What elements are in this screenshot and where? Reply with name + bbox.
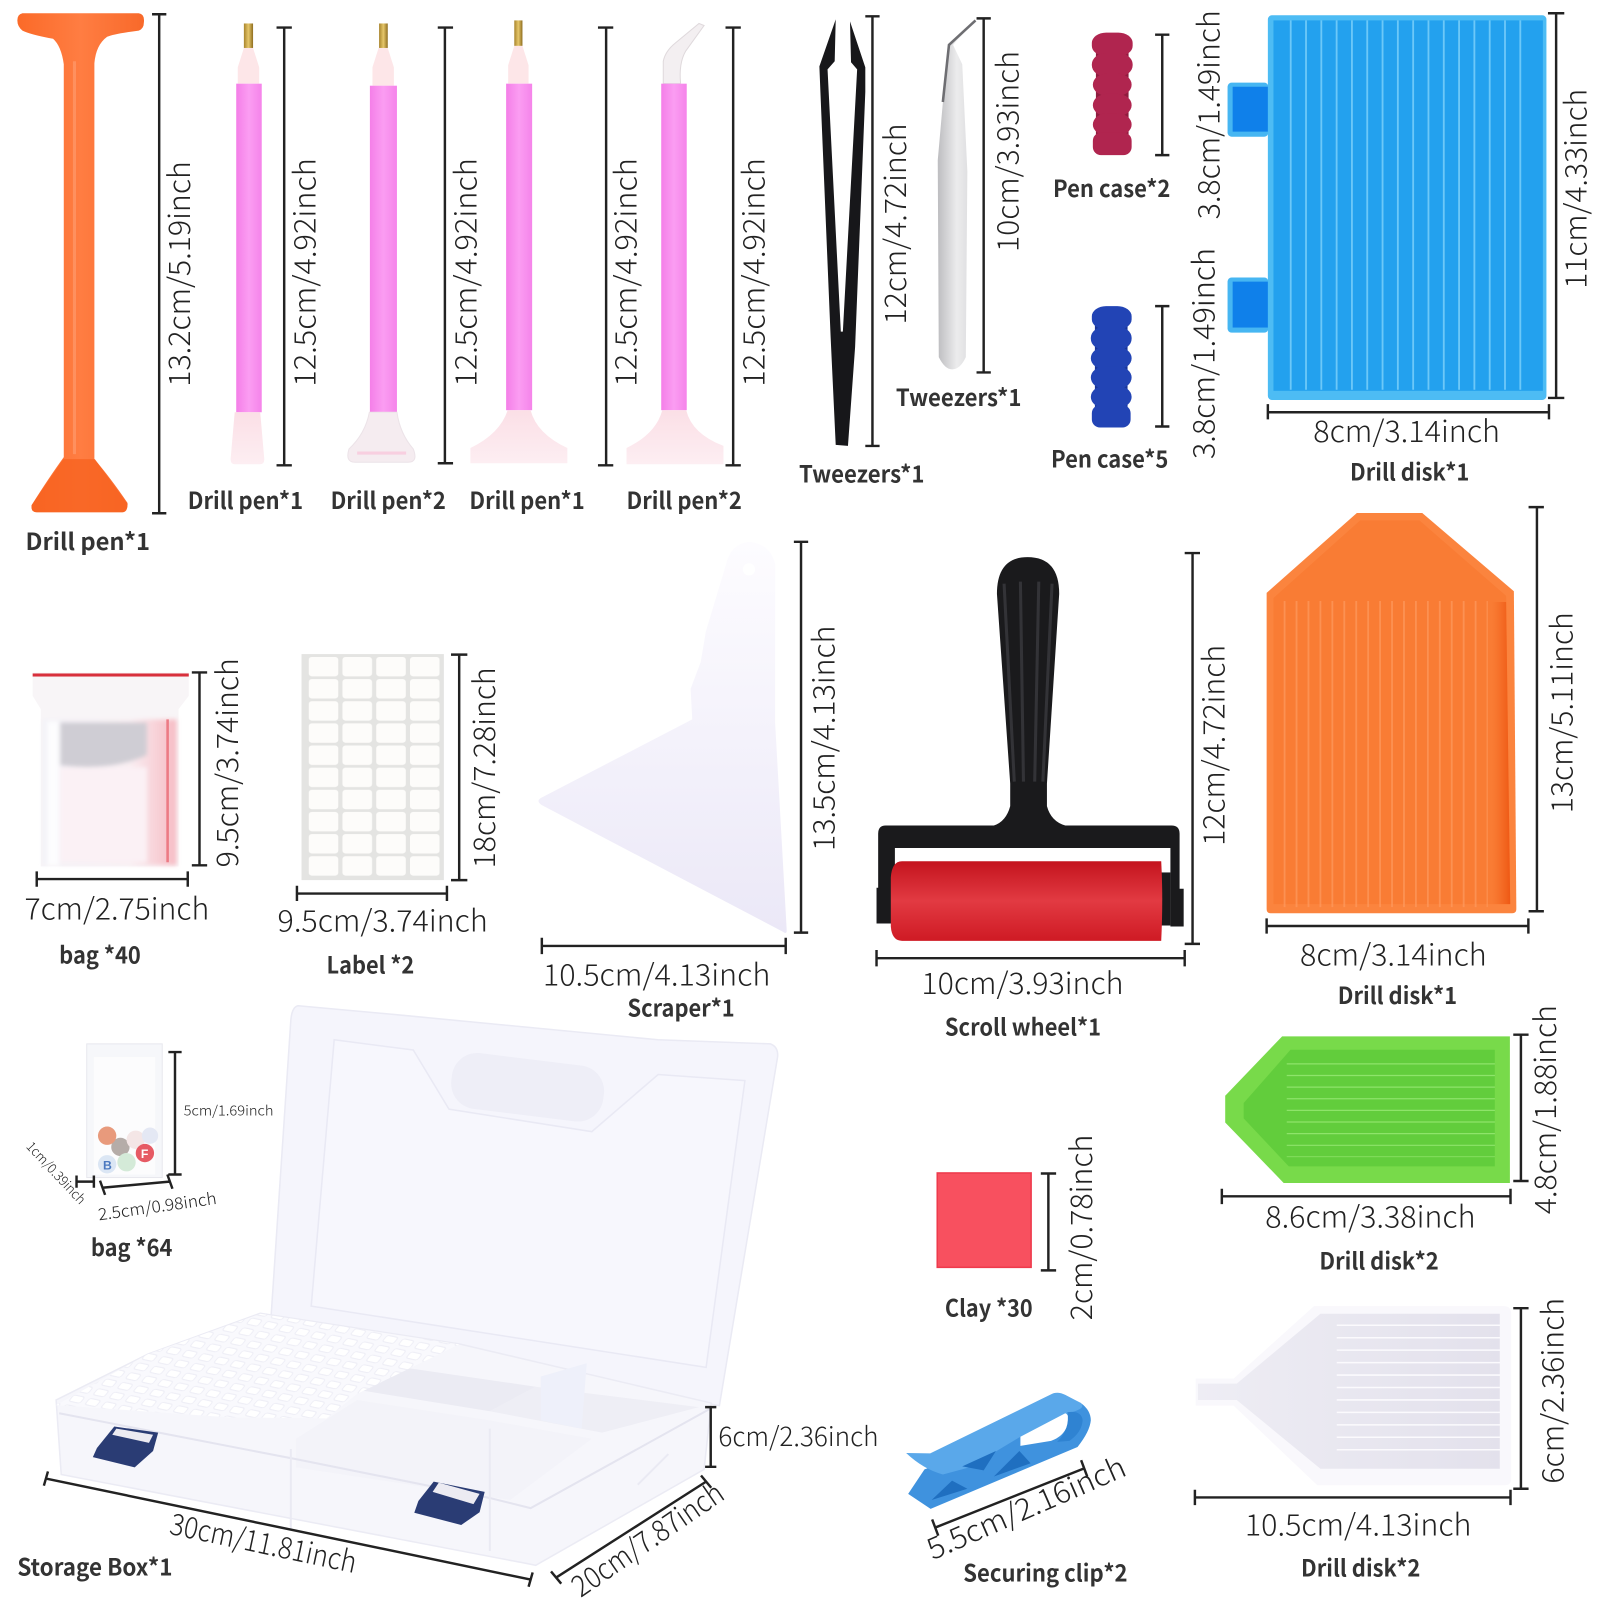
text: 12.5cm/4.92inch: 12.5cm/4.92inch — [603, 158, 646, 387]
text: 9.5cm/3.74inch: 9.5cm/3.74inch — [278, 898, 488, 941]
label: Drill pen*2: Drill pen*2 — [331, 482, 446, 516]
icon: open transparent storage box — [56, 1006, 778, 1565]
label: bag *64: bag *64 — [91, 1229, 173, 1263]
dimension: white tray width — [1195, 1490, 1511, 1505]
icon: pink pen four — [627, 23, 723, 464]
text: 6cm/2.36inch: 6cm/2.36inch — [1529, 1298, 1572, 1484]
dimension: clip length — [932, 1460, 1087, 1536]
icon: red foam pen case — [1092, 33, 1133, 155]
icon: white triangular scraper — [538, 542, 787, 933]
label: Drill pen*1: Drill pen*1 — [469, 482, 585, 516]
text: 13.5cm/4.13inch: 13.5cm/4.13inch — [801, 626, 844, 851]
lid of box — [270, 1006, 778, 1406]
icon: orange pointed tray — [1267, 513, 1516, 913]
label: Securing clip*2: Securing clip*2 — [963, 1555, 1128, 1589]
bead bottles inside box — [56, 1314, 459, 1418]
icon: black handled red roller — [877, 557, 1184, 941]
text: 12cm/4.72inch: 12cm/4.72inch — [1190, 645, 1233, 846]
dimension: black tweezers height — [865, 16, 880, 446]
dimension: pen four height — [726, 28, 741, 465]
item: small bead bottle — [23, 1044, 273, 1263]
icon: clear zip bag — [33, 672, 189, 866]
dimension: bottle height — [168, 1052, 182, 1174]
text: 11cm/4.33inch: 11cm/4.33inch — [1553, 89, 1596, 289]
left latch — [93, 1427, 158, 1467]
label: Tweezers*1: Tweezers*1 — [896, 379, 1021, 413]
text: 10.5cm/4.13inch: 10.5cm/4.13inch — [543, 952, 770, 995]
text: 12.5cm/4.92inch: 12.5cm/4.92inch — [730, 158, 773, 387]
dimension: green tray width — [1222, 1189, 1511, 1204]
dimension: white tray height — [1513, 1308, 1529, 1489]
icon: blue securing clip — [906, 1393, 1091, 1509]
text: 3.8cm/1.49inch: 3.8cm/1.49inch — [1185, 10, 1228, 219]
icon: clear bottle with letter beads: B — [103, 1158, 112, 1172]
item: pink drill pen with narrow tip — [188, 23, 324, 516]
label: Drill pen*1: Drill pen*1 — [26, 523, 150, 557]
icon: green pointed tray — [1225, 1036, 1510, 1183]
icon: orange double-ended drill pen — [17, 13, 144, 512]
base of box — [56, 1313, 711, 1565]
label: Drill disk*2: Drill disk*2 — [1319, 1242, 1439, 1276]
text: 12.5cm/4.92inch: 12.5cm/4.92inch — [281, 158, 324, 387]
text: 5.5cm/2.16inch: 5.5cm/2.16inch — [919, 1444, 1132, 1568]
text: 8.6cm/3.38inch: 8.6cm/3.38inch — [1265, 1194, 1476, 1237]
text: 5cm/1.69inch: 5cm/1.69inch — [184, 1099, 273, 1119]
dimension: clay height — [1041, 1173, 1056, 1270]
dimension: drill pen height — [152, 14, 166, 513]
right latch — [414, 1482, 485, 1525]
text: 10.5cm/4.13inch: 10.5cm/4.13inch — [1245, 1502, 1471, 1545]
dimension: bottle width and depth — [77, 1174, 172, 1195]
text: 2.5cm/0.98inch: 2.5cm/0.98inch — [96, 1185, 218, 1225]
dimension: bag height — [192, 672, 207, 865]
icon: blue rectangular tray — [1228, 15, 1546, 400]
icon: pink pen two — [348, 23, 415, 462]
dimension: roller width — [877, 950, 1185, 966]
text: 13cm/5.11inch: 13cm/5.11inch — [1538, 612, 1581, 813]
item: blue pen case — [1051, 248, 1223, 474]
text: 10cm/3.93inch: 10cm/3.93inch — [921, 960, 1123, 1003]
dimension: roller height — [1185, 553, 1200, 944]
label: Tweezers*1: Tweezers*1 — [799, 456, 924, 490]
text: 30cm/11.81inch: 30cm/11.81inch — [166, 1500, 361, 1582]
label: Drill disk*1: Drill disk*1 — [1338, 977, 1457, 1011]
dimension: blue tray width — [1268, 404, 1549, 419]
text: 10cm/3.93inch: 10cm/3.93inch — [984, 51, 1027, 252]
text: 13.2cm/5.19inch: 13.2cm/5.19inch — [156, 161, 199, 387]
dimension: box width — [551, 1476, 711, 1584]
text: 4.8cm/1.88inch: 4.8cm/1.88inch — [1522, 1005, 1565, 1214]
dimension: scraper height — [794, 542, 808, 933]
item: storage box — [17, 1006, 879, 1600]
dimension: label sheet width — [297, 886, 447, 901]
label: Clay *30: Clay *30 — [945, 1289, 1033, 1323]
label: Scroll wheel*1: Scroll wheel*1 — [945, 1009, 1101, 1043]
dimension: orange tray height — [1529, 507, 1544, 911]
dimension: label sheet height — [451, 655, 467, 880]
label: Label *2: Label *2 — [327, 946, 414, 980]
icon: pink pen three — [470, 20, 567, 463]
dimension: red pen case height — [1155, 35, 1169, 155]
dimension: box length — [44, 1471, 533, 1587]
label: Drill disk*2: Drill disk*2 — [1301, 1550, 1420, 1584]
dimension: pen three height — [598, 28, 613, 465]
text: 7cm/2.75inch: 7cm/2.75inch — [24, 885, 209, 928]
icon: label sheet grid — [302, 654, 444, 880]
item: white drill disk — [1195, 1298, 1572, 1584]
dimension: blue tray height — [1548, 13, 1564, 398]
label: Storage Box*1: Storage Box*1 — [17, 1549, 172, 1583]
dimension: green tray height — [1513, 1035, 1529, 1181]
label: bag *40: bag *40 — [59, 936, 141, 970]
item: silver tweezers — [896, 18, 1027, 413]
text: 12.5cm/4.92inch: 12.5cm/4.92inch — [443, 158, 486, 387]
icon: red clay square — [937, 1173, 1031, 1267]
text: 12cm/4.72inch: 12cm/4.72inch — [872, 123, 915, 324]
item: red pen case — [1053, 10, 1228, 219]
label: Pen case*5: Pen case*5 — [1051, 440, 1168, 474]
icon: white funnel tray — [1196, 1306, 1511, 1485]
dimension: scraper width — [542, 938, 786, 954]
label: Drill pen*1: Drill pen*1 — [188, 482, 303, 516]
item: scraper — [538, 542, 844, 1023]
item: green drill disk — [1222, 1005, 1565, 1276]
item: securing clip — [906, 1393, 1132, 1589]
icon: pink pen one — [231, 23, 264, 464]
item: pink drill pen with wide foot — [469, 20, 646, 516]
label: Drill disk*1: Drill disk*1 — [1350, 454, 1469, 488]
dimension: pen two height — [438, 28, 453, 463]
icon: clear bottle with letter beads: F — [141, 1147, 149, 1161]
label: Pen case*2: Pen case*2 — [1053, 170, 1170, 204]
label: Scraper*1: Scraper*1 — [628, 989, 735, 1023]
text: 3.8cm/1.49inch: 3.8cm/1.49inch — [1180, 248, 1223, 459]
icon: clear bottle with letter beads — [87, 1044, 162, 1178]
dimension: orange tray width — [1267, 918, 1528, 934]
item: roller — [877, 553, 1233, 1043]
item: orange drill disk — [1267, 507, 1581, 1011]
icon: silver tweezers — [938, 19, 976, 369]
dimension: bag width — [37, 871, 188, 887]
text: 8cm/3.14inch: 8cm/3.14inch — [1313, 408, 1500, 451]
icon: blue foam pen case — [1091, 306, 1132, 428]
label: Drill pen*2: Drill pen*2 — [627, 482, 742, 516]
dimension: box height — [705, 1407, 716, 1467]
item: clay — [937, 1135, 1101, 1323]
dimension: pen one height — [277, 28, 292, 465]
text: 8cm/3.14inch: 8cm/3.14inch — [1300, 931, 1487, 974]
item: pink drill pen with clear foot — [331, 23, 486, 516]
item: pink drill pen with bent tip — [627, 23, 773, 516]
item: blue drill disk — [1228, 13, 1596, 488]
text: 1cm/0.39inch: 1cm/0.39inch — [23, 1137, 91, 1208]
item: black tweezers — [799, 16, 924, 490]
item: zip bag — [24, 658, 247, 970]
dimension: silver tweezers height — [977, 18, 991, 372]
item: orange drill pen — [17, 13, 199, 557]
text: 18cm/7.28inch: 18cm/7.28inch — [461, 667, 504, 868]
item: label sheet — [278, 654, 504, 980]
dimension: blue pen case height — [1155, 306, 1169, 427]
text: 2cm/0.78inch: 2cm/0.78inch — [1058, 1135, 1101, 1320]
icon: black tweezers — [819, 19, 865, 446]
text: 6cm/2.36inch: 6cm/2.36inch — [718, 1415, 879, 1454]
text: 9.5cm/3.74inch: 9.5cm/3.74inch — [204, 658, 247, 867]
